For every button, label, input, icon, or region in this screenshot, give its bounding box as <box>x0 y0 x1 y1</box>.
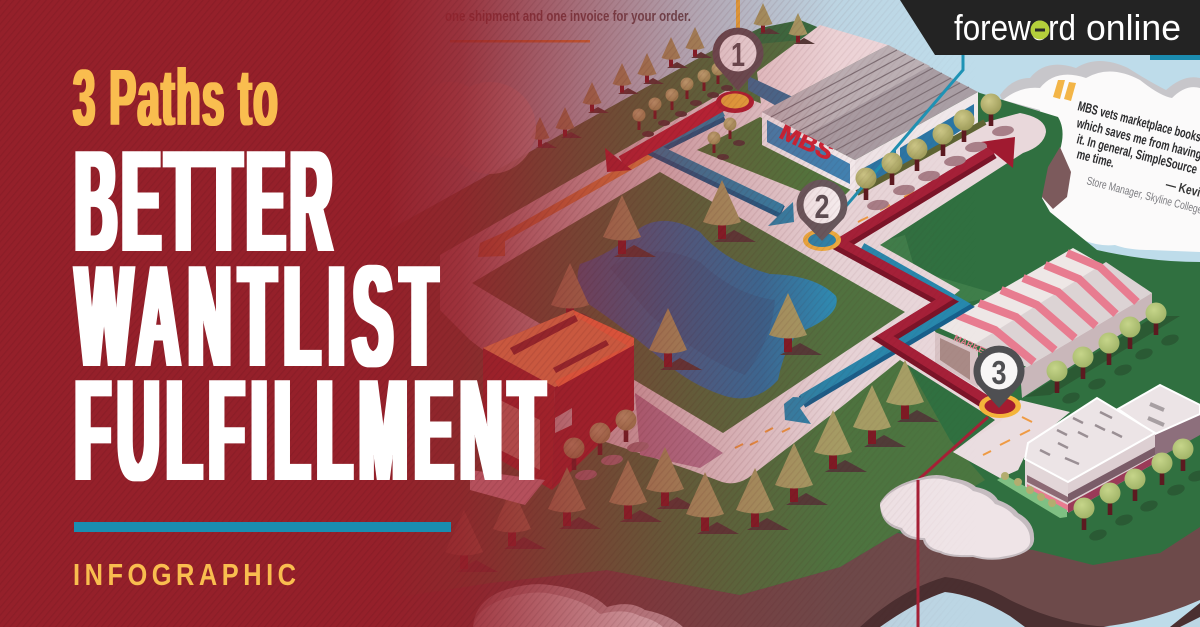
warehouse: MBS <box>762 45 978 192</box>
subtitle: 3 Paths to <box>73 54 279 143</box>
warehouse MBS sign: MBS <box>776 118 838 165</box>
sky beneath island <box>880 592 1200 627</box>
pond <box>578 221 837 398</box>
tent roof <box>937 248 1152 367</box>
pin 1: 1 <box>731 36 745 73</box>
tent ground shadow <box>1025 316 1180 397</box>
pin 3 <box>974 346 1025 418</box>
quote cloud <box>1000 61 1200 252</box>
logo wordmark: online <box>1086 7 1181 48</box>
market tent <box>935 248 1180 398</box>
logo wordmark <box>954 7 1181 48</box>
grass square around pond <box>472 172 905 433</box>
garden strip <box>997 475 1067 518</box>
lower white cloud <box>880 475 1034 627</box>
red building roof, bright <box>470 310 634 505</box>
rear building windows <box>748 76 795 108</box>
pin 3: 3 <box>992 354 1006 391</box>
rear wing <box>1120 385 1200 460</box>
blue divider bar <box>74 522 451 532</box>
quote body <box>1074 100 1200 177</box>
logo green dot <box>1030 20 1050 40</box>
left wall <box>1025 459 1068 512</box>
warehouse side wall <box>855 92 978 192</box>
quote body: MBS vets marketplace books <box>1076 100 1200 145</box>
title <box>75 121 551 512</box>
quote body: it. In general, SimpleSource <box>1075 132 1199 177</box>
trail: orange arrow <box>478 153 653 257</box>
warehouse ribbed roof <box>762 45 978 160</box>
quote body: which saves me from having <box>1074 116 1200 163</box>
quote text <box>1053 80 1200 227</box>
title: BETTER <box>75 121 337 283</box>
roads <box>440 90 1060 483</box>
faded cloud bottom <box>473 584 683 627</box>
island grass <box>380 20 1200 600</box>
lower road patch <box>635 393 723 468</box>
yellow route line <box>736 0 740 30</box>
inner grass by warehouse <box>697 117 865 205</box>
trail: red arrows <box>605 100 1015 402</box>
office roof <box>1025 398 1155 482</box>
diagonal stripe texture <box>0 0 897 627</box>
faded upper copy line: one shipment and one invoice for your order. <box>445 9 691 25</box>
olive hill <box>380 40 985 600</box>
pink rear roof <box>757 25 888 112</box>
planter strip by warehouse <box>857 122 985 193</box>
trail: blue arrows <box>653 112 962 424</box>
rock under quote <box>1042 147 1071 209</box>
tent gable <box>935 332 990 395</box>
thin teal route line <box>840 55 963 213</box>
logo wordmark: foreword <box>954 7 1076 48</box>
plaza <box>953 400 1070 478</box>
pin 1 <box>713 28 764 113</box>
office building <box>953 385 1200 518</box>
right wall <box>1068 433 1155 513</box>
faded cloud upper left <box>412 82 536 174</box>
title: FULFILLMENT <box>75 350 551 512</box>
label: infographic: INFOGRAPHIC <box>73 558 296 593</box>
solid left panel <box>0 0 390 627</box>
header banner <box>900 0 1200 60</box>
tent wall <box>1020 293 1152 398</box>
road dashes <box>735 165 1032 455</box>
pin 2: 2 <box>814 188 830 225</box>
brown soil layer <box>380 480 1200 627</box>
quote mark <box>1053 80 1076 101</box>
pine trees <box>445 3 939 572</box>
roof vents <box>1040 412 1122 464</box>
tent stripes <box>957 253 1137 362</box>
title: WANTLIST <box>76 236 445 397</box>
warehouse front wall <box>762 112 855 192</box>
pin 2 <box>797 180 848 251</box>
round trees <box>564 62 1200 543</box>
tent sign: MARKET <box>952 333 992 358</box>
quote body: me time. <box>1075 147 1116 171</box>
red building <box>483 310 634 490</box>
light green slope <box>868 235 1000 305</box>
dark soil underside <box>860 577 1200 627</box>
thin red route line <box>918 417 988 627</box>
pond depth <box>610 251 775 375</box>
